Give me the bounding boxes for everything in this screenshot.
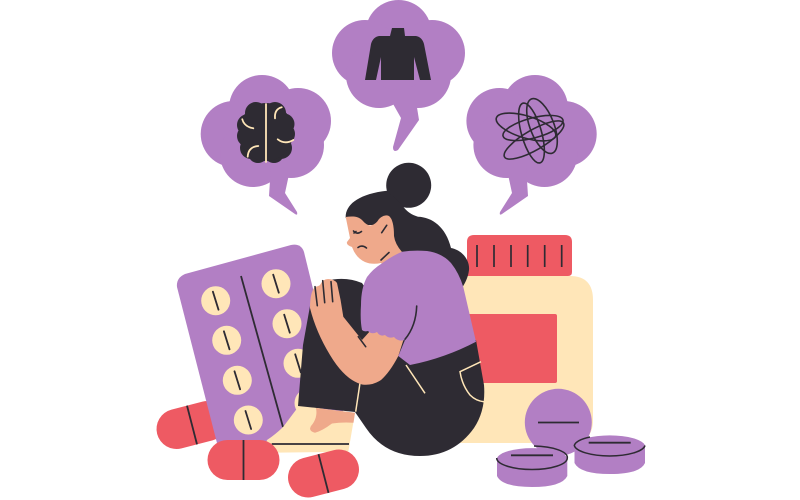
arm and hand [310,279,405,385]
icon: brain [237,102,295,163]
round tablet [525,389,592,456]
icon: tangled scribble [493,95,568,166]
red capsule: left [152,397,232,453]
medicine bottle [445,235,593,443]
bottle label [460,314,557,383]
thought bubble: brain [201,75,331,215]
flat tablet: right [574,435,645,474]
thought bubble: tangled scribble [466,75,597,215]
bottle cap [467,235,572,276]
red capsule: right [284,445,363,500]
blister pack [177,245,350,447]
thought bubble: sweater [332,0,465,151]
hair [346,163,469,288]
shoe and ankle [266,407,355,453]
purple shirt [361,251,476,365]
red capsule: centre [208,440,280,480]
icon: sweater [365,28,431,80]
flat tablet: left [497,446,567,487]
bottle body [445,276,593,443]
black trousers [298,279,484,456]
face [346,215,402,266]
blister tablets [201,269,324,434]
